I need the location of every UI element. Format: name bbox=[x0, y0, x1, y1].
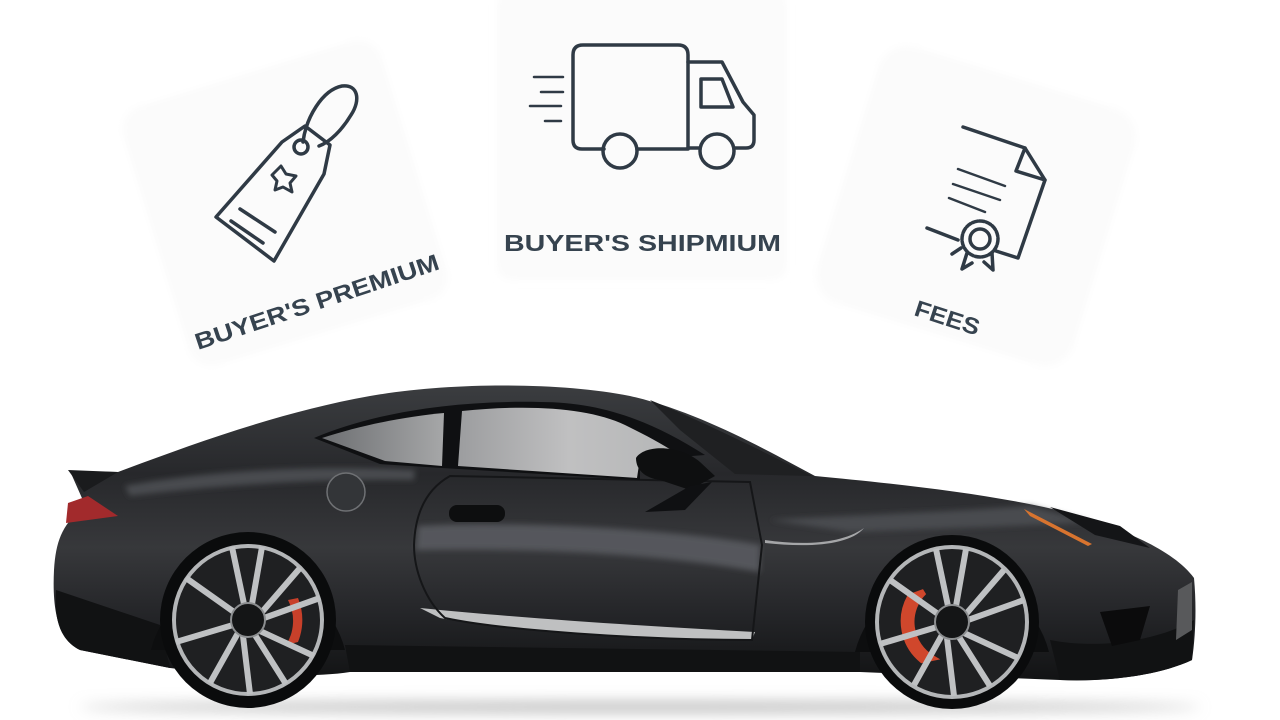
spoiler bbox=[68, 470, 118, 492]
car bbox=[54, 386, 1195, 709]
car body bbox=[54, 386, 1195, 680]
ground shadow bbox=[80, 702, 1200, 712]
headlight bbox=[1024, 509, 1092, 546]
sill reflection bbox=[420, 608, 755, 640]
lower body shade bbox=[56, 590, 1194, 680]
label: buyer's shipmium: BUYER'S SHIPMIUM bbox=[504, 230, 781, 256]
windshield bbox=[650, 400, 812, 476]
side vent bbox=[765, 528, 864, 545]
front grille bbox=[1100, 606, 1150, 646]
label: buyer's premium: BUYER'S PREMIUM bbox=[191, 249, 442, 355]
windows bbox=[314, 402, 705, 480]
door line bbox=[414, 476, 762, 640]
door handle bbox=[449, 505, 505, 522]
panel: shipping card bbox=[497, 0, 787, 280]
tail light bbox=[66, 496, 118, 523]
front wheel bbox=[855, 535, 1049, 709]
icon: certificate document bbox=[927, 127, 1045, 270]
icon: price tag bbox=[216, 86, 357, 261]
label: fees: FEES bbox=[911, 295, 983, 340]
fuel cap bbox=[327, 473, 365, 511]
panel: buyer's premium card bbox=[116, 34, 454, 372]
rear wheel bbox=[151, 532, 345, 708]
body highlights bbox=[125, 468, 1090, 572]
mirror bbox=[636, 448, 715, 490]
icon: delivery truck bbox=[530, 45, 754, 168]
panel: fees card bbox=[809, 39, 1143, 373]
